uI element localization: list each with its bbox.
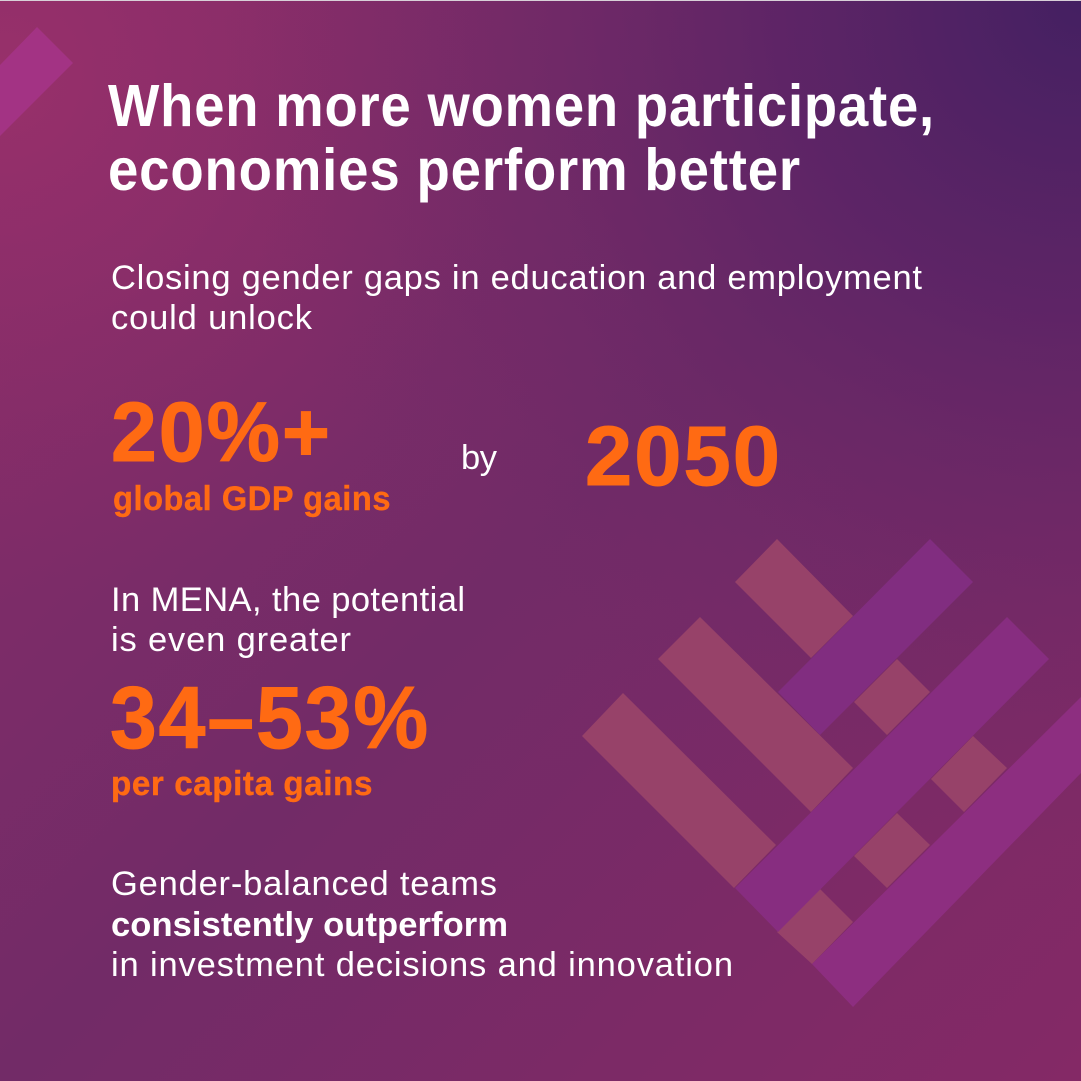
- MENA text: is even greater: [111, 621, 351, 659]
- woven heart graphic: [582, 539, 1081, 1007]
- stat: 2050: 2050: [585, 409, 782, 503]
- stat: 20%+ global GDP gains: global GDP gains: [113, 480, 391, 518]
- closing text: Gender-balanced teams: [111, 865, 497, 903]
- MENA text: [111, 581, 465, 659]
- intro text: Closing gender gaps in education and employment: [111, 259, 922, 297]
- closing text: [111, 865, 733, 984]
- purple diagonal bars: [735, 539, 1081, 1007]
- closing text: in investment decisions and innovation: [111, 946, 733, 984]
- stat: 34–53% per capita gains: 34–53%: [110, 668, 430, 767]
- decorative corner bar: [0, 27, 73, 136]
- closing text: consistently outperform: [111, 906, 508, 944]
- stat: 20%+ global GDP gains: 20%+: [111, 385, 332, 479]
- pink diagonal bars: [582, 539, 1007, 964]
- stat: 34–53% per capita gains: per capita gains: [111, 765, 373, 803]
- title: economies perform better: [108, 137, 801, 203]
- intro text: could unlock: [111, 299, 313, 337]
- intro text: [111, 259, 922, 337]
- by label: by: [461, 439, 498, 477]
- stat: 20%+ global GDP gains: [111, 385, 391, 518]
- title: When more women participate,: [108, 73, 935, 139]
- MENA text: In MENA, the potential: [111, 581, 465, 619]
- title: [108, 73, 935, 203]
